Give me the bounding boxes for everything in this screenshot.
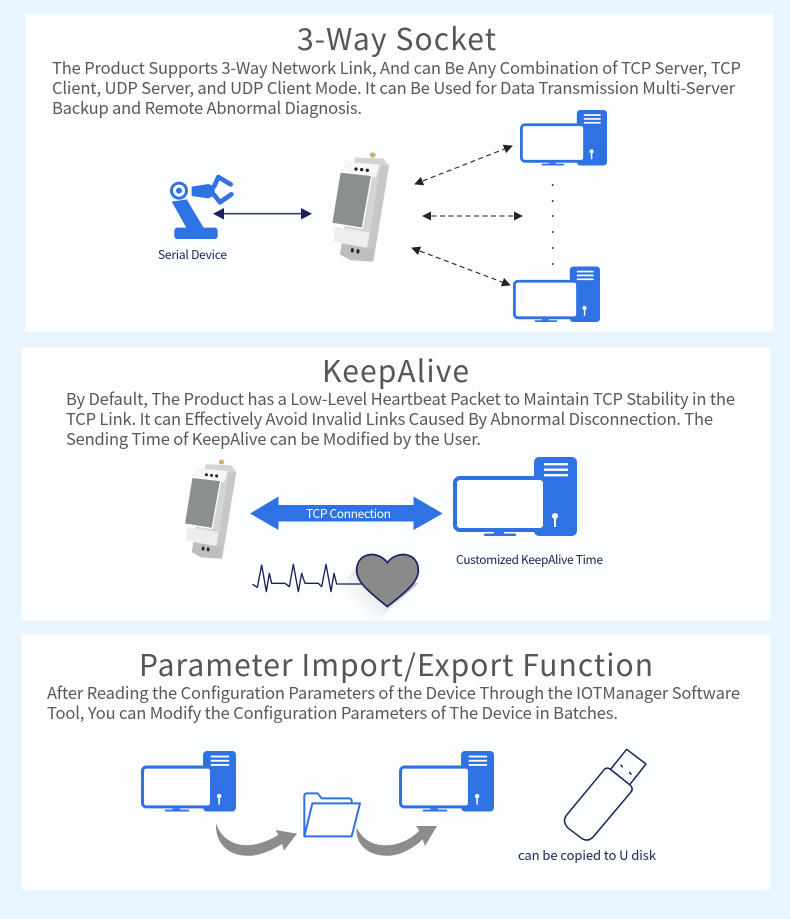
- icon: top computer: [521, 110, 607, 166]
- arrow: TCP connection: [250, 496, 443, 530]
- text block: keepalive description: By Default, The Product has a Low-Level Heartbeat Packet to Maintain TCP Stability in the: [66, 386, 735, 410]
- arrow: robot to device: [213, 208, 312, 220]
- icon: device: [184, 460, 236, 559]
- heading: 3-Way Socket: 3-Way Socket: [297, 15, 496, 59]
- text block: socket description: The Product Supports 3-Way Network Link, And can Be Any Combination of TCP Server, TCP: [52, 55, 741, 79]
- panel: 3-way socket: [25, 14, 773, 332]
- icon: robot arm: [170, 177, 231, 239]
- label: serial device: Serial Device: [158, 246, 227, 263]
- text block: keepalive description: TCP Link. It can Effectively Avoid Invalid Links Caused By Abnormal Disconnection. The: [66, 406, 713, 430]
- text block: socket description: Client, UDP Server, and UDP Client Mode. It can Be Used for Data Transmission Multi-Server: [52, 75, 736, 99]
- icon: device: [332, 152, 389, 262]
- icon: USB disk: [565, 749, 646, 840]
- text block: keepalive description: Sending Time of KeepAlive can be Modified by the User.: [66, 426, 481, 450]
- label: customized keepalive time: Customized KeepAlive Time: [456, 551, 603, 568]
- panel: keepalive: [22, 347, 770, 621]
- panel: parameter import/export: [22, 634, 770, 890]
- arrow: TCP connection: TCP Connection: [306, 505, 391, 522]
- arrow: device to bottom computer: [412, 248, 510, 285]
- icon: source computer: [143, 751, 236, 812]
- text block: parameter description: Tool, You can Modify the Configuration Parameters of The Device in Batches.: [47, 700, 618, 724]
- text block: socket description: Backup and Remote Abnormal Diagnosis.: [52, 95, 362, 119]
- label: can be copied to U disk: can be copied to U disk: [518, 845, 657, 864]
- icon: bottom computer: [514, 266, 600, 322]
- text block: keepalive description: [66, 386, 735, 450]
- text block: socket description: [52, 55, 741, 119]
- icon: server computer: [455, 457, 577, 536]
- heading: KeepAlive: KeepAlive: [322, 347, 469, 391]
- text block: parameter description: [47, 680, 740, 724]
- arrow: device to middle: [423, 215, 522, 217]
- icon: heartbeat: [252, 555, 418, 621]
- dotted connector: [552, 184, 554, 265]
- icon: target computer: [401, 751, 494, 812]
- heading: Parameter Import/Export Function: Parameter Import/Export Function: [139, 641, 653, 685]
- text block: parameter description: After Reading the Configuration Parameters of the Device Through the IOTManager Software: [47, 680, 740, 704]
- icon: folder: [304, 793, 360, 836]
- arrow: folder to computer: [357, 826, 437, 856]
- arrow: device to top computer: [415, 146, 512, 184]
- arrow: computer to folder: [216, 823, 297, 856]
